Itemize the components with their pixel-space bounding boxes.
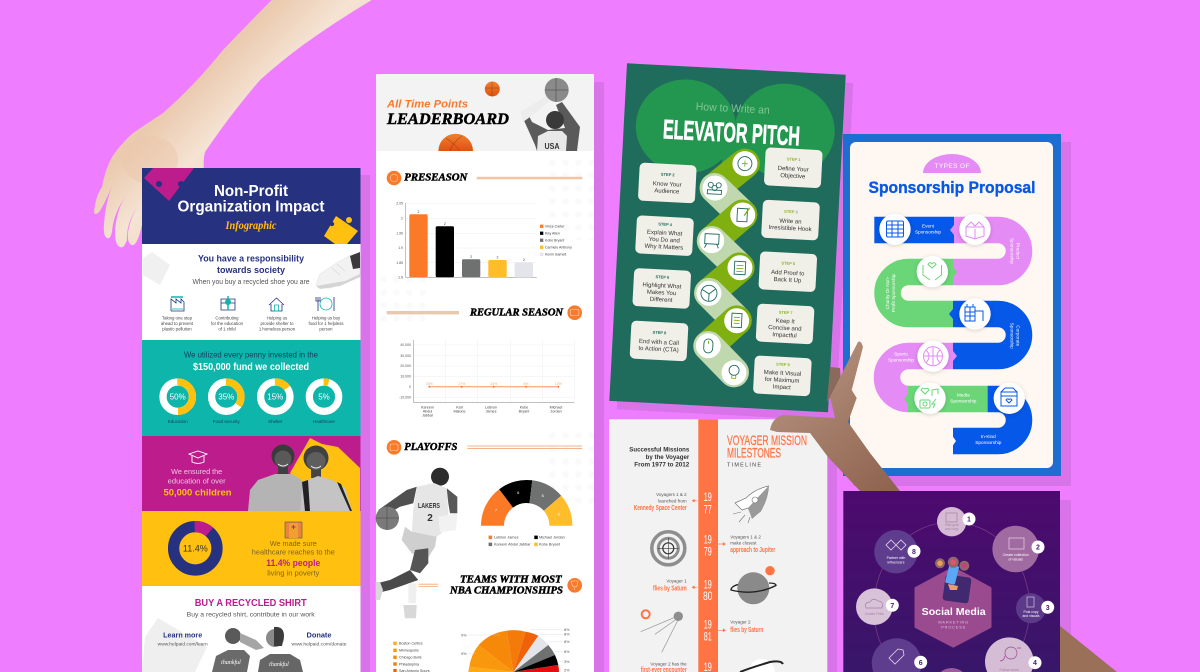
legend: Michael Jordan [539, 536, 565, 540]
legend: Boston Celtics [399, 642, 423, 646]
step 1 [937, 507, 976, 536]
panel: elevator pitch: Why It Matters [644, 244, 683, 252]
legend: Kobe Bryant [545, 239, 564, 243]
captions: provide shelter to [261, 321, 294, 326]
icon: media [920, 388, 938, 408]
step 2: Create collection [1003, 553, 1029, 557]
legend: Kareem Abdul Jabbar [494, 543, 531, 547]
icon: target [652, 532, 685, 565]
phone illustration [935, 557, 972, 604]
captions: Contributing [215, 315, 239, 320]
zigzag path [705, 162, 745, 372]
panel: elevator pitch: STEP 9 [776, 362, 791, 367]
basketball player dribbling: LAKERS [418, 503, 440, 510]
timeline years: 80 [703, 589, 713, 603]
snake labels [885, 224, 1021, 445]
header photo band: LEADERBOARD [386, 111, 509, 128]
icon: planet [731, 566, 776, 604]
line chart: regular season: 33% [426, 382, 433, 386]
half donut chart: playoffs: 6 [517, 490, 520, 495]
timeline years [703, 490, 713, 672]
fund section with donuts: 35% [218, 393, 234, 402]
snake path [874, 225, 1019, 446]
bar chart: preseason: 2 [444, 222, 446, 226]
fund section with donuts [142, 340, 360, 436]
line chart: regular season: 10,000 [400, 374, 411, 378]
icon: calendar [886, 221, 904, 237]
pie chart: nba championships: 6% [564, 650, 570, 654]
legend [393, 642, 430, 672]
heading: playoffs [387, 440, 582, 455]
healthcare section [142, 511, 360, 586]
panel: elevator pitch: for Maximum [765, 377, 800, 385]
half donut chart: playoffs [481, 480, 572, 547]
fund section with donuts: Education [168, 419, 188, 424]
line chart: regular season: 27% [458, 382, 465, 386]
step 4: Follow some [999, 668, 1019, 672]
snake labels: Corporate [1016, 325, 1021, 347]
fund section with donuts: We utilized every penny invested in the [184, 351, 319, 360]
snake labels: Media [957, 392, 970, 398]
panel: elevator pitch: STEP 1 [787, 156, 801, 162]
bar chart: preseason: 2 [523, 258, 525, 262]
types of tab: TYPES OF [934, 163, 970, 170]
heading: regular season: REGULAR SEASON [469, 307, 564, 318]
panel: elevator pitch: Highlight What [642, 282, 682, 290]
milestone texts: Voyager 1 [666, 579, 687, 584]
captions: plastic pollution [162, 326, 192, 331]
responsibility section: towards society [217, 265, 286, 276]
title: MILESTONES [727, 445, 781, 461]
education section: 50,000 children [164, 487, 232, 497]
captions: 1 homeless person [259, 326, 296, 331]
line chart: regular season: Malone [453, 410, 466, 414]
panel: elevator pitch: Make It Visual [764, 370, 801, 378]
panel: elevator pitch: Objective [780, 173, 806, 180]
step icons [692, 149, 759, 386]
subtitle left: Successful Missions [629, 446, 690, 453]
snake labels: Sponsorship [975, 440, 1002, 445]
puzzle piece [290, 438, 360, 511]
panel: elevator pitch: End with a Call [639, 339, 679, 347]
header photo band: All Time Points [386, 98, 468, 110]
step 6 [872, 638, 927, 672]
hand: top arm holding non-profit poster [94, 0, 372, 247]
responsibility section [143, 252, 360, 331]
heading: regular season [387, 305, 582, 320]
header photo band [376, 74, 594, 151]
panel: voyager mission milestones: approach to Jupiter [730, 547, 775, 554]
education section: We ensured the [171, 467, 222, 476]
timeline years: 77 [704, 503, 712, 517]
line chart: regular season: 0 [409, 385, 411, 389]
header band [142, 168, 360, 244]
pie chart: nba championships [393, 628, 570, 672]
circle icons [879, 214, 1025, 414]
step 2: of visuals [1008, 558, 1023, 562]
heading: teams with most nba championships [418, 575, 582, 596]
panel: elevator pitch: Impact [773, 384, 791, 391]
panel: elevator pitch: STEP 3 [784, 209, 799, 214]
panel: elevator pitch: Different [650, 297, 673, 304]
captions: person [319, 326, 333, 331]
icon: donation box [1001, 388, 1017, 406]
line chart: regular season: Jabbar [422, 414, 434, 418]
small basketball [485, 82, 500, 96]
captions: of 1 child [218, 326, 236, 331]
panel: elevator pitch: STEP 2 [661, 172, 675, 177]
line chart: regular season: Abdul [423, 410, 432, 414]
icon: buildings [965, 304, 983, 321]
title: Sponsorship Proposal [868, 179, 1036, 197]
header band: Infographic [225, 218, 277, 232]
snake labels: Product [1016, 243, 1021, 260]
timeline years: 19 [704, 490, 712, 504]
icon: hospital [285, 522, 302, 538]
panel: sponsorship proposal [843, 134, 1071, 486]
panel: voyager mission milestones: flies by Saturn [730, 627, 763, 634]
captions [161, 315, 344, 331]
line chart: regular season: Bryant [519, 410, 529, 414]
snake labels: Sponsorship [888, 358, 914, 363]
step 7: Create Polls [865, 612, 884, 616]
pie chart: nba championships: 9% [461, 652, 467, 656]
step 4: 4 [1033, 660, 1037, 667]
panel: all time points leaderboard [376, 74, 604, 672]
step 2 [992, 526, 1044, 572]
heading: teams with most nba championships: TEAMS WITH MOST [460, 575, 563, 586]
line chart: regular season: 30,000 [400, 354, 411, 358]
step 2: 2 [1036, 544, 1040, 552]
fund section with donuts: 50% [170, 393, 186, 402]
legend: LeBron James [494, 536, 519, 540]
buy a recycled shirt section: BUY A RECYCLED SHIRT [195, 597, 307, 609]
icon: caring hands [923, 263, 942, 280]
healthcare section: We made sure [270, 539, 317, 548]
captions: Taking one step [162, 315, 193, 320]
healthcare section: 11.4% people [266, 558, 320, 568]
title: How to Write an [695, 101, 770, 117]
step 3: Post copy [1024, 610, 1039, 614]
icon: graduation cap [189, 451, 207, 464]
types of tab [923, 154, 981, 173]
line chart: regular season: 6% [523, 382, 529, 386]
step 8 [874, 530, 920, 573]
pie chart: nba championships: 8% [564, 628, 570, 632]
snake labels: Event [922, 224, 935, 228]
panel: elevator pitch: Impactful [772, 332, 797, 340]
healthcare section: 11.4% [183, 544, 208, 554]
captions: Helping us [267, 315, 287, 320]
legend: Philadelphia [399, 662, 420, 666]
step 1: 1 [967, 516, 971, 524]
fund section with donuts: Healthcare [313, 419, 335, 424]
timeline years: 81 [704, 630, 712, 644]
icon: plate and cutlery [316, 297, 334, 311]
panel: elevator pitch: Write an [779, 218, 802, 226]
step 6: 6 [919, 660, 923, 667]
legend: Kobe Bryant [539, 543, 561, 547]
milestone texts: launched from [658, 498, 687, 503]
snake labels: Profit Sponsorship [891, 273, 896, 312]
title [662, 99, 801, 151]
pie chart: nba championships: 9% [461, 633, 467, 637]
fund section with donuts: 5% [318, 393, 330, 402]
panel: elevator pitch: Keep It [776, 318, 795, 325]
icon: basketball [924, 347, 942, 366]
pie chart: nba championships: 3% [564, 660, 570, 664]
people photo [212, 627, 303, 672]
line chart: regular season: 33% [490, 382, 497, 386]
line chart: regular season: Jordan [550, 410, 562, 414]
snake labels: In-Kind [981, 434, 996, 439]
bar chart: preseason: 2 [470, 255, 472, 259]
hand: holding posters from the middle [770, 342, 900, 491]
bar chart: preseason: 2.05 [396, 202, 403, 206]
legend: Ray Allen [545, 232, 560, 236]
legend: Chicago Bulls [399, 656, 422, 660]
timeline years: 79 [704, 545, 712, 559]
fund section with donuts: 15% [267, 393, 283, 402]
milestone texts: make closest [730, 540, 757, 545]
bar chart: preseason: 1.9 [398, 246, 403, 250]
line chart: regular season: Karl [456, 406, 463, 410]
education section [142, 436, 360, 511]
panel: elevator pitch: Add Proof to [771, 270, 805, 278]
line chart: regular season: 40,000 [400, 343, 411, 347]
panel: voyager mission milestones: Kennedy Space Center [634, 505, 687, 512]
timeline years: 19 [704, 532, 712, 546]
education section: education of over [168, 476, 226, 485]
line chart: regular season: Kobe [520, 406, 528, 410]
panel: elevator pitch: STEP 4 [658, 221, 673, 227]
snake labels: Sponsorship [1010, 323, 1015, 349]
snake labels: Sponsorship [950, 399, 977, 404]
title: TIMELINE [727, 462, 761, 468]
panel: elevator pitch: Know Your [653, 181, 682, 189]
bar chart: preseason: 2 [497, 256, 499, 260]
line chart: regular season: 12% [555, 382, 562, 386]
panel: elevator pitch: to Action (CTA) [638, 346, 679, 354]
captions: ahead to prevent [161, 321, 194, 326]
line chart: regular season [399, 340, 574, 418]
line chart: regular season: -10,000 [399, 396, 411, 400]
fund section with donuts: Shelter [268, 419, 283, 424]
buy a recycled shirt section: www.helpaid.com/learn [158, 641, 208, 646]
legend: Kevin Garnett [545, 253, 566, 257]
subtitle left: by the Voyager [646, 454, 690, 461]
panel: voyager mission milestones [609, 419, 837, 672]
icon: rocket [733, 486, 768, 523]
panel: elevator pitch: You Do and [649, 237, 680, 245]
bar chart: preseason [396, 202, 572, 280]
people photo: thankful [221, 659, 241, 666]
panel: social media marketing process [843, 491, 1071, 672]
icon: school [221, 296, 235, 310]
buy a recycled shirt section: Donate [306, 632, 332, 639]
heading: preseason: PRESEASON [404, 173, 468, 184]
basketball player shooting: USA [544, 142, 560, 151]
line chart: regular season: James [486, 410, 497, 414]
basketball player dribbling: 2 [427, 513, 433, 524]
snake labels: Sports [894, 352, 908, 356]
panel: non-profit organization impact [142, 168, 370, 672]
snake labels: Charity Or Non- [885, 276, 890, 309]
hexagon: social media: MARKETING [938, 621, 969, 625]
half donut chart: playoffs: 6 [558, 512, 561, 516]
step 3 [1016, 593, 1054, 623]
step 1: Plan goal [945, 523, 959, 527]
snake labels: Sponsorship [915, 230, 941, 235]
buy a recycled shirt section: www.helpaid.com/donate [292, 641, 347, 646]
step 7: 7 [890, 603, 894, 610]
icon: saturn [740, 659, 783, 672]
captions: food for 1 helpless [308, 321, 344, 326]
snake labels: Sponsorship [1010, 238, 1015, 264]
step 1: and copy [945, 527, 959, 531]
panel: elevator pitch: STEP 5 [781, 260, 796, 266]
step 8: Partner with [887, 556, 905, 560]
hexagon: social media [916, 557, 990, 646]
header band: Non-Profit [214, 183, 288, 200]
title: ELEVATOR PITCH [662, 114, 801, 151]
step 7 [856, 588, 899, 625]
basketball player shooting [520, 78, 580, 151]
heading: playoffs: PLAYOFFS [404, 442, 458, 453]
milestone texts: Voyager 2 [730, 619, 751, 624]
buy a recycled shirt section: Buy a recycled shirt, contribute in our work [187, 611, 315, 618]
subtitle left [629, 446, 690, 469]
hexagon: social media: PROCESS [941, 625, 966, 629]
panel: elevator pitch: Back It Up [773, 277, 802, 284]
buy a recycled shirt section [142, 597, 347, 672]
heading: preseason [387, 171, 582, 185]
half donut chart: playoffs: 6 [542, 493, 545, 498]
legend [489, 536, 565, 547]
icon: house [269, 298, 284, 311]
step 5 [935, 668, 969, 672]
fund section with donuts: $150,000 fund we collected [193, 362, 309, 373]
hexagon: social media: Social Media [922, 606, 986, 618]
bar chart: preseason: 2 [401, 216, 403, 220]
pie chart: nba championships: 8% [564, 633, 570, 637]
panel: elevator pitch [609, 63, 853, 421]
fund section with donuts: Food security [213, 419, 241, 424]
step 8: influencers [888, 560, 905, 564]
milestone texts [650, 492, 761, 667]
panel: elevator pitch: Define Your [778, 166, 809, 174]
responsibility section: You have a responsibility [198, 254, 305, 265]
panel: elevator pitch: STEP 8 [652, 330, 667, 335]
shoe [316, 252, 360, 289]
people photo: thankful [269, 661, 289, 668]
milestone texts: Voyagers 1 & 2 [656, 492, 687, 497]
children photo [248, 444, 352, 511]
title [727, 432, 807, 468]
bar chart: preseason: 1.8 [398, 276, 403, 280]
bar chart: preseason: 1.85 [396, 261, 403, 265]
responsibility section: When you buy a recycled shoe you are [192, 277, 310, 286]
panel: elevator pitch: Explain What [647, 230, 683, 238]
milestone texts: Voyagers 1 & 2 [730, 534, 761, 539]
captions: for the education [211, 321, 244, 326]
legend [540, 225, 572, 257]
legend: Carmelo Anthony [545, 246, 572, 250]
panel: elevator pitch: Irresistible Hook [768, 225, 813, 233]
step 4 [985, 637, 1042, 672]
panel: elevator pitch: Concise and [768, 325, 802, 333]
line chart: regular season: Michael [550, 406, 563, 410]
heart backdrop [633, 76, 837, 181]
captions: Helping us buy [312, 315, 341, 320]
buy a recycled shirt section: Learn more [163, 632, 202, 639]
step 8: 8 [912, 549, 916, 556]
bar chart: preseason: 2 [418, 210, 420, 214]
basketball player dribbling [376, 468, 457, 618]
healthcare section: healthcare reaches to the [252, 548, 335, 557]
title: VOYAGER MISSION [727, 432, 807, 448]
panel: elevator pitch: STEP 6 [655, 274, 670, 280]
panel: voyager mission milestones: flies by Saturn [653, 586, 687, 593]
arrows [692, 500, 725, 632]
line chart: regular season: LeBron [485, 406, 497, 410]
subtitle left: From 1977 to 2012 [634, 462, 690, 469]
step 3: 3 [1046, 605, 1050, 612]
hand: bottom right [1060, 626, 1117, 672]
healthcare section: living in poverty [267, 568, 320, 577]
large basketball [438, 134, 473, 151]
panel: elevator pitch: Makes You [647, 290, 676, 297]
line chart: regular season: 20,000 [400, 364, 411, 368]
half donut chart: playoffs: 7 [495, 508, 498, 512]
icon: factory [171, 297, 184, 311]
pie chart: nba championships: 8% [564, 640, 570, 644]
header band: Organization Impact [178, 199, 324, 216]
legend: Vince Carter [545, 225, 565, 229]
line chart: regular season: Kareem [421, 406, 434, 410]
timeline years: 19 [704, 617, 712, 631]
step 3: and visuals [1023, 614, 1040, 618]
step cards [628, 141, 823, 396]
icon: satellite [641, 610, 683, 652]
timeline years: 19 [704, 577, 712, 591]
icon: gift box [966, 222, 984, 239]
milestone texts: Voyager 2 has the [650, 662, 687, 667]
bar chart: preseason: 1.95 [396, 232, 403, 236]
heading: teams with most nba championships: NBA CHAMPIONSHIPS [449, 585, 563, 596]
panel: elevator pitch: STEP 7 [779, 310, 793, 315]
legend: Minneapolis [399, 649, 419, 653]
panel: elevator pitch: Audience [654, 188, 680, 196]
